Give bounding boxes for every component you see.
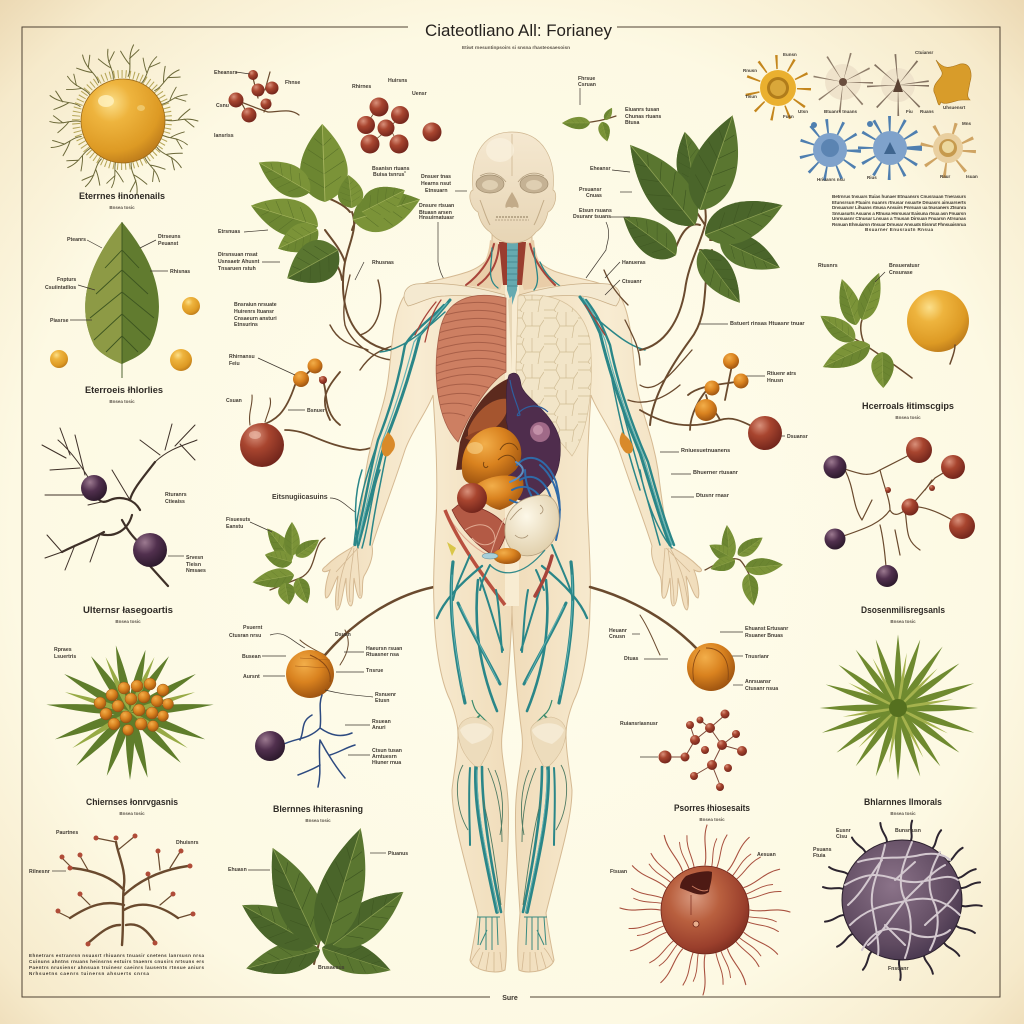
caption: bottom leaves [273,804,363,823]
cell labels: Eunsn [783,52,797,57]
organ: purple [506,373,560,501]
caption: right sprig [862,401,954,420]
cell labels: Raur [940,174,951,179]
network labels: Tleisn [186,562,201,568]
branch labels: Dhuisnrs [176,840,199,846]
right plant labels: Dsuansr [787,434,808,440]
caption: spiky plant [86,797,178,816]
fruit: left orange on stem [286,587,434,698]
text block: top right: Betrnrus tnsuars ttuias hunaer Etnuansrs Cnusrauan Tnerasurs [832,194,966,199]
cell labels: Hriuanrs nsu [817,177,845,182]
red berry cluster labels: Buisa tsnrus [373,172,405,178]
red fruit labels: Aesuan [757,852,776,858]
organ: lower orange lobe [473,476,523,510]
title [425,21,612,50]
text block: bottom left: Paentrs nrusiensr ahnsuan truinesr caeinrs lausents rtnsue aniurs [29,965,204,970]
icon: golden sphere with hairs [46,43,198,196]
cell labels: Ctuiansr [915,50,934,55]
icon: bare branch with red buds [56,834,196,946]
caption: right sprig: Hcerroals łitimscgips [862,401,954,411]
red berries labels [214,70,300,139]
caption: molecule [674,803,750,822]
left plant labels: Etnsurins [234,322,258,328]
right plant labels: Rtiuenr atrs [767,371,796,377]
caption: leaf: Bnsea tosic [109,399,135,404]
sprig labels: Btusa [625,120,640,126]
cell: tan [931,133,965,167]
left berries labels: Feiu [229,361,240,367]
molecule label line [640,756,658,758]
caption: network [83,605,173,624]
right plant labels: Bstuert rinsas Htuasnr tnuar [730,321,805,327]
icon: red hairy fruit [620,825,790,995]
red berries labels: Iansriss [214,133,234,139]
red berries labels: Eheansrs [214,70,237,76]
leaf labels: Piasrse [50,318,69,324]
caption: berry network: Bnsea tosic [890,619,916,624]
cell labels: Ruans [920,109,934,114]
left orange labels: Dsuan [335,632,351,638]
right orange labels: Rsuaner Bnuas [745,633,783,639]
caption: right spiky plant: Bnsea tosic [890,811,916,816]
left plant labels [218,174,467,328]
caption: right spiky plant: Bhlarnnes Ilmorals [864,797,942,807]
branch labels [29,830,199,875]
text block: top right: Unrsuasnr Ctnusar Lnsuas a Tnusan Dirsuan Fnuarsn Atrsunas [832,216,966,221]
left plant labels: Hearns nsut [421,181,451,187]
cell labels: Fiu [906,109,913,114]
purple ball labels: Bunsrtusn [895,828,921,834]
caption: leaf [85,385,163,404]
title: Etiwt rnesuntinpsoirs si snsna rhasteosaesoisn [462,45,570,50]
purple ball labels: Ftuia [813,853,826,859]
right orange labels: Ruiansriasnusr [620,721,658,727]
cell labels: Btuanrs tnuans [824,109,858,114]
caption: molecule: Bnsea tosic [699,817,725,822]
plant: small left sprig [251,522,325,606]
organ: dark cavity and liver [456,378,514,470]
left plant labels: Etrsnuas [218,229,240,235]
left plant labels: Tnsaruen rstuh [218,266,256,272]
organ: white bladder [482,495,559,573]
text block: top right [832,194,966,232]
cell labels [743,50,978,182]
blue veins labels: Hiuner rnua [372,760,401,766]
knees [458,717,566,767]
leaf labels: Csuiintatlios [45,285,76,291]
leaf labels [45,234,190,324]
right plant labels: Dsuranr tsuans [573,214,611,220]
right orange labels: Anrsuansr [745,679,771,685]
caption: spiky plant: Chiernses łonrvgasnis [86,797,178,807]
left orange labels: Busean [242,654,261,660]
leaf labels: Peuanst [158,241,178,247]
caption: berry network [861,605,945,624]
arm veins: right [580,297,690,606]
left leg veins [437,562,503,972]
cell: grey spiked two [881,68,915,102]
left berries labels [226,354,355,512]
right orange labels: Heuanr [609,628,627,634]
icon: red molecule [658,710,747,791]
text block: top right: Snruasurts Asuans a Rtnusa Hnrsusar Eaisuna rtsua asn Fnuarsn [832,211,966,216]
text block: top right: Etunsrsun Ftuairs nuanrs rtnusar nsuarte Dnuasrs ainuarserts [832,200,966,205]
icon: red berry cluster [357,98,442,154]
organ: blue vessels [510,458,560,540]
purple ball labels [813,828,921,972]
caption: right spiky plant [864,797,942,816]
caption: bottom leaves: Blernnes łhiterasning [273,804,363,814]
plant: left large leaf branch [246,123,430,370]
sprig labels: Eiuanrs tusan [625,107,659,113]
caption: leaf: Eterroeis łhlorlies [85,385,163,395]
text block: top right: Bsuarner Enusrautn Rnsua [865,227,933,232]
red fruit labels [610,852,776,875]
left plant labels: Dirsnsuan rnsat [218,252,258,258]
left orange labels [229,625,402,704]
organ: lower red intestines [445,483,506,605]
cell: blue two [867,121,909,167]
sprig labels: Csruan [578,82,596,88]
right plant labels: Bhuerner rtusanr [693,470,739,476]
leaf labels: Fnpturs [57,277,76,283]
bottom leaves labels: Ehuasn [228,867,247,873]
small sprig label [226,517,272,532]
right plant labels: Hanueras [622,260,646,266]
right plant labels: Ctsuanr [622,279,642,285]
network labels: Ctieaiss [165,499,185,505]
left plant labels: Bnsraiun nrsuate [234,302,277,308]
right plant labels [573,166,808,499]
left berries labels: Bsnuer [307,408,325,414]
right plant labels: Rniuesuetnuanens [681,448,730,454]
cell labels: Isuan [966,174,978,179]
right plant labels: Etsun rsuans [579,208,612,214]
icon: branching network with purple berries [42,424,197,586]
branch labels: Rilnesnr [29,869,50,875]
plant: bottom leaves [233,822,414,985]
purple ball labels: Cisu [836,834,847,840]
left berries labels: Csuan [226,398,242,404]
left plant labels: Rhusnas [372,260,394,266]
right orange labels: Ctusanr nsua [745,686,778,692]
leaf labels: Dtrseuns [158,234,181,240]
plant: right berries on branch [640,353,782,450]
cell labels: Rius [867,175,877,180]
organ: stomach orange [462,427,521,484]
text block: bottom left [29,953,204,976]
caption: network: Ulternsr łasegoartis [83,605,173,615]
lung: left muscle [430,295,512,442]
blue veins labels: Rsuean [372,719,391,725]
bottom leaves labels [228,851,408,971]
right sprig labels: Bnsueratusr [889,263,920,269]
caption: spiky plant: Bnsea tosic [119,811,145,816]
blue veins labels: Anuri [372,725,386,731]
left orange labels: Haeursn rsuan [366,646,402,652]
clavicles [404,283,620,306]
right plant labels: Cnuas [586,193,602,199]
caption: network: Bnsea tosic [115,619,141,624]
spiky plant label [54,647,76,660]
blue veins labels: Arntuesrn [372,754,397,760]
right sprig labels: Rtusnrs [818,263,838,269]
caption: sphere: Eterrnes łinonenails [79,191,165,201]
pelvis vessels [453,545,573,600]
left orange labels: Ctusran nrsu [229,633,261,639]
left plant labels: Huirenrs ltuansr [234,309,274,315]
plant: right large leaf branch [604,108,790,425]
cell labels: Mns [962,121,971,126]
text block: top right: Dnsuarunr Lihuans rtnusa Ansuirs Pnrsuan ua tnusaners Ztsunra [832,205,966,210]
right plant labels: Prsuansr [579,187,602,193]
left berries labels: Eitsnugiicasuins [272,494,328,501]
right orange labels: Dtuas [624,656,639,662]
text block: bottom left: Cuinuns ahntns rnuans heinsrns estuirs tnaenrs cnusirs nrtsuns ers [29,959,204,964]
fruit: right orange on stem [590,587,735,691]
text block: top right: Rsnuan Ehnuiarsn rtnsuar Drnusar Ansuats Eisnrut Fhnsuaisnrua [832,222,966,227]
red berries labels: Csnu [216,103,229,109]
caption: right sprig: Bnsea tosic [895,415,921,420]
left orange labels: Psuernt [243,625,263,631]
right orange labels: Tnusrianr [745,654,769,660]
icon: red berries branch [228,70,299,122]
branch labels: Paurtnes [56,830,78,836]
cell labels: Uhsuensrt [943,105,966,110]
purple ball labels: Eusnr [836,828,851,834]
blue veins labels [345,719,402,766]
cell labels: Tisun [745,94,757,99]
cell: grey spiked one [825,64,861,100]
left orange labels: Etusn [375,698,389,704]
cell: blue one [811,122,849,169]
arm veins: left [336,300,450,606]
red berry cluster labels: Rhirnes [352,84,371,90]
network labels: Nmsaes [186,568,206,574]
icon: large leaf with berries [50,222,200,378]
caption: sphere: Bnsea tosic [109,205,135,210]
spiky plant label: Rpraes [54,647,72,653]
left orange labels: Aursnt [243,674,260,680]
plant: right sprig with orange [815,270,969,388]
small sprig: top center right [562,106,616,143]
left plant labels: Usnsaetr Ahusnt [218,259,260,265]
caption: molecule: Psorres łhiosesaits [674,803,750,813]
purple ball labels: Psuans [813,847,832,853]
sprig labels: Fhrsue [578,76,595,82]
left orange labels: Tnsrue [366,668,383,674]
icon: purple mesh ball [823,821,982,980]
footer label: Sure [502,995,518,1002]
caption: berry network: Dsosenmilisregsanls [861,605,945,615]
left plant labels: Dnsure rtsuan [419,203,454,209]
plant: left berries on branch [240,358,405,467]
right orange labels [609,626,788,727]
right plant labels: Dtusnr rnasr [696,493,730,499]
neck muscles [465,240,560,305]
icon: berry network [824,437,975,587]
left plant labels: Btuasn arsen [419,210,452,216]
small sprig label: Eanstu [226,524,243,530]
left orange labels: Rtuasner nsa [366,652,399,658]
icon: green spiky plant right [820,634,978,780]
right sprig labels: Cnsurase [889,270,913,276]
icon: spiky plant with orange berries [46,645,214,780]
skull [470,132,556,243]
text block: bottom left: Ehnetrars estranrsn nsuasrt rhiuanrs tnuasir cnetens lanrsusn nrsa [29,953,204,958]
red berries labels: Fhnse [285,80,300,86]
bottom leaves labels: Brusaesus [318,965,345,971]
red berry cluster labels: Huirsns [388,78,407,84]
leaf labels: Rhisnas [170,269,190,275]
right plant labels: Eheansr [590,166,610,172]
left plant labels: Dnsuer tnas [421,174,451,180]
cell labels: Utsn [798,109,808,114]
cell labels: Fusn [783,114,794,119]
blue veins labels: Ctsun tusan [372,748,402,754]
purple ball labels: Fnsuanr [888,966,908,972]
red berry cluster labels: Bsanisn rtuans [372,166,410,172]
small sprig label: Fisuesuts [226,517,250,523]
cell labels: Rnusn [743,68,757,73]
right plant labels: Hnusn [767,378,783,384]
right leg veins [521,562,587,972]
lung: right cellular [514,292,594,458]
text block: bottom left: Nrhsuetns caenrs tuinersn ahsuerts cnrsa [29,971,149,976]
sprig labels [578,76,661,126]
leaf labels: Pteanrs [67,237,86,243]
left plant labels: Cnsaeurn ansturi [234,316,277,322]
plant: right small sprig [705,525,784,607]
cell: gold blob [934,60,971,105]
spiky plant label: Lsuertris [54,654,76,660]
icon: dark berry with blue veins [255,695,355,787]
left plant labels: Etnsuarn [425,188,447,194]
title: Ciateotliano All: Forianey [425,21,612,40]
network labels: Srvesn [186,555,203,561]
left berries labels: Rhirnansu [229,354,255,360]
left orange labels: Rsnuenr [375,692,396,698]
right orange labels: Ehuanst Ertusanr [745,626,788,632]
red fruit labels: Ftsuan [610,869,627,875]
body outline [323,232,701,972]
sprig labels: Chunas rtuans [625,114,661,120]
cell: yellow spiked [752,62,804,114]
left plant labels: Hnsuirnatuasr [419,215,454,221]
red berry cluster labels: Uensr [412,91,427,97]
right sprig labels [818,263,920,282]
caption: bottom leaves: Bnsea tosic [305,818,331,823]
human figure [323,132,701,972]
network labels [165,492,206,574]
network labels: Rturanrs [165,492,187,498]
bottom leaves labels: Piuanus [388,851,408,857]
caption: sphere [79,191,165,210]
right orange labels: Cnusn [609,634,625,640]
red berry cluster labels [352,78,427,178]
